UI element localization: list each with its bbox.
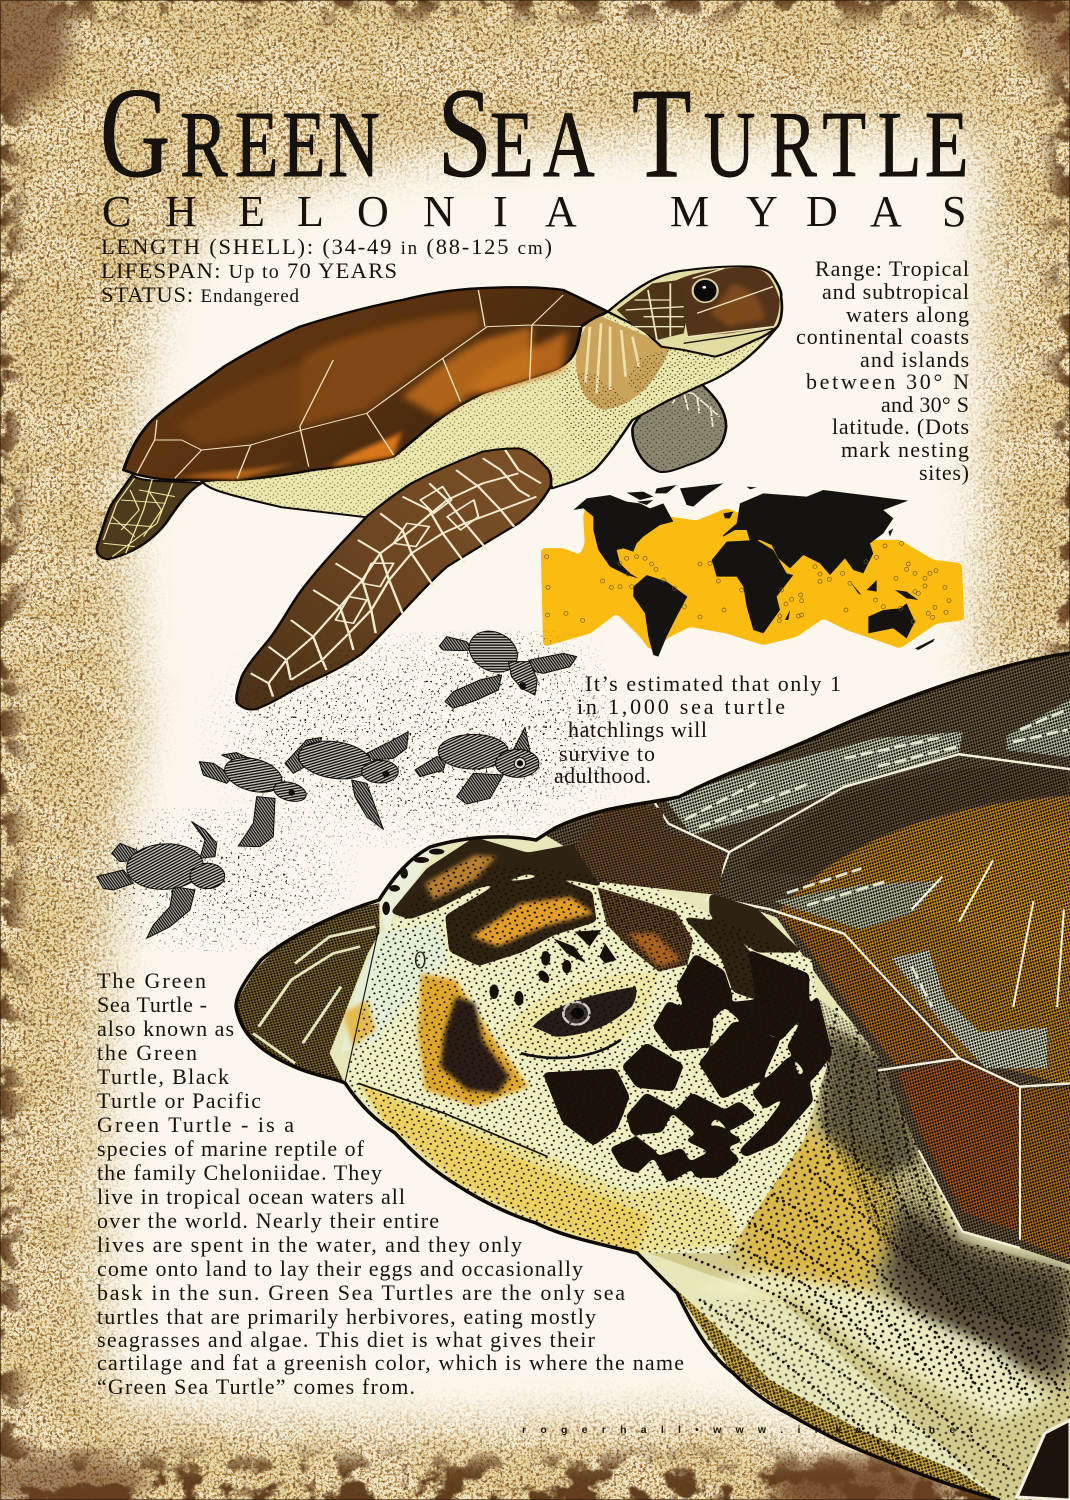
- neck: [240, 836, 1070, 1500]
- range text: continental coasts: [796, 324, 969, 349]
- orange head accents: [425, 855, 594, 947]
- main description text: seagrasses and algae. This diet is what gives their: [97, 1327, 596, 1352]
- hatchling stipple: [71, 630, 647, 952]
- plastron and neck: [202, 312, 777, 517]
- cheek patch: [343, 973, 529, 1107]
- main description text: come onto land to lay their eggs and occasionally: [97, 1256, 583, 1281]
- hatchling 1: [439, 624, 577, 708]
- hatchling survival text: in 1,000 sea turtle: [577, 694, 785, 719]
- title: A: [543, 94, 595, 197]
- range text: between 30° N: [806, 369, 969, 394]
- continents: [573, 483, 935, 657]
- white brow band: [379, 848, 444, 937]
- turtle outline: [236, 653, 1070, 1500]
- head: [608, 266, 782, 357]
- key facts: LIFESPAN: Up to 70 YEARS: [101, 258, 397, 283]
- key facts: STATUS: Endangered: [101, 282, 300, 307]
- hatchling survival text: It’s estimated that only 1: [585, 671, 841, 696]
- hatchling survival text: [554, 671, 841, 788]
- main description text: lives are spent in the water, and they only: [97, 1232, 522, 1257]
- snout: [341, 923, 448, 1053]
- range text: latitude. (Dots: [832, 414, 969, 439]
- range text: and islands: [860, 347, 969, 372]
- yellow range band: [541, 508, 964, 650]
- main description text: the Green: [97, 1040, 197, 1065]
- title: U: [704, 94, 755, 197]
- hatchling 2: [415, 727, 539, 804]
- title: N: [328, 94, 380, 197]
- main description text: live in tropical ocean waters all: [97, 1184, 405, 1209]
- hatchling 4: [199, 752, 308, 847]
- main description text: bask in the sun. Green Sea Turtles are the only sea: [97, 1280, 625, 1305]
- main description text: species of marine reptile of: [97, 1136, 365, 1161]
- main description text: The Green: [97, 968, 206, 993]
- main description text: Turtle, Black: [97, 1064, 229, 1089]
- title: R: [769, 94, 817, 197]
- main description text: [97, 968, 684, 1399]
- title: S: [438, 62, 492, 204]
- scales around eye: [489, 930, 617, 1006]
- range text: and 30° S: [881, 392, 969, 417]
- main description text: Sea Turtle -: [97, 992, 207, 1017]
- hatchling survival text: adulthood.: [554, 763, 651, 788]
- title: E: [490, 94, 534, 197]
- large turtle portrait: [230, 640, 1070, 1500]
- main description text: “Green Sea Turtle” comes from.: [97, 1374, 415, 1399]
- head skin: [345, 867, 827, 1253]
- jaw line: [358, 1083, 548, 1157]
- main description text: cartilage and fat a greenish color, which is where the name: [97, 1350, 684, 1375]
- rear flipper: [97, 475, 202, 559]
- hatchling survival text: survive to: [559, 741, 655, 766]
- title: T: [822, 94, 866, 197]
- main description text: turtles that are primarily herbivores, eating mostly: [97, 1304, 596, 1329]
- title: G: [100, 62, 170, 204]
- carapace: [123, 287, 608, 480]
- title: E: [235, 94, 278, 197]
- dark scutes: [550, 957, 827, 1177]
- range text: [796, 256, 969, 485]
- main description text: Turtle or Pacific: [97, 1088, 261, 1113]
- range text: and subtropical: [822, 279, 969, 304]
- beak lobe: [237, 903, 379, 1083]
- title: L: [878, 94, 921, 197]
- hatchling survival text: hatchlings will: [568, 717, 707, 742]
- range text: sites): [919, 460, 969, 485]
- near front flipper: [236, 448, 551, 709]
- key facts: [101, 234, 552, 307]
- artist credit: r o g e r h a l l • w w w . i n k a r t . n e t: [522, 1424, 973, 1436]
- shell: [540, 640, 1070, 1268]
- title: T: [632, 62, 691, 204]
- title: E: [925, 94, 969, 197]
- nesting sites: [545, 541, 951, 624]
- nostril: [416, 952, 425, 968]
- scute orange: [628, 933, 682, 967]
- hatchlings: [97, 624, 577, 938]
- main description text: also known as: [97, 1016, 234, 1041]
- hatchling 5: [97, 822, 225, 938]
- head: [237, 802, 827, 1253]
- range text: Range: Tropical: [815, 256, 969, 281]
- range map: [541, 483, 964, 657]
- scientific name: CHELONIAMYDAS: [102, 187, 966, 236]
- brown dotted scutes: [574, 802, 726, 972]
- head stipple: [345, 867, 827, 1253]
- eye: [498, 973, 659, 1058]
- range text: waters along: [846, 302, 969, 327]
- far front flipper: [632, 385, 726, 472]
- hatchling 3: [285, 732, 408, 829]
- range text: mark nesting: [841, 437, 969, 462]
- key facts: LENGTH (SHELL): (34-49 in (88-125 cm): [101, 234, 552, 259]
- title: E: [282, 94, 326, 197]
- main description text: over the world. Nearly their entire: [97, 1208, 439, 1233]
- main description text: Green Turtle - is a: [97, 1112, 294, 1137]
- adult turtle illustration: [97, 266, 782, 709]
- cheek and jaw colour: [360, 1083, 651, 1253]
- upper brown scutes: [395, 840, 796, 997]
- title: R: [180, 94, 228, 197]
- main description text: the family Cheloniidae. They: [97, 1160, 382, 1185]
